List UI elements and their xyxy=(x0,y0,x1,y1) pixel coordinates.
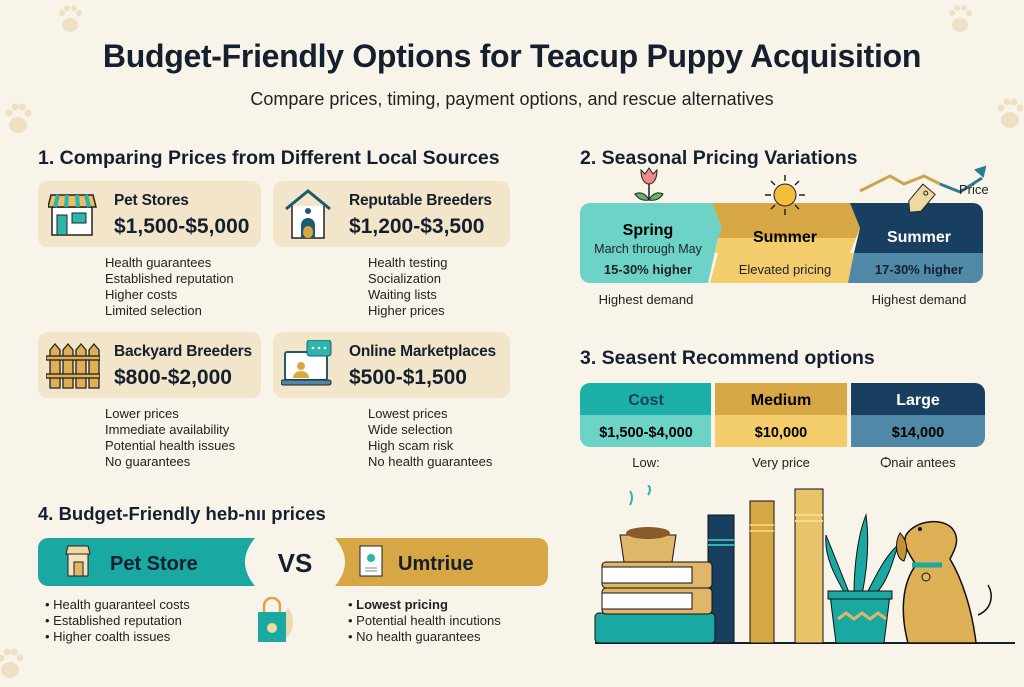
icon: small store xyxy=(66,546,90,576)
list: reputable breeders: Waiting lists xyxy=(368,287,437,302)
list: pet stores: Limited selection xyxy=(105,303,202,318)
title: Budget-Friendly Options for Teacup Puppy Acquisition xyxy=(103,38,921,74)
list: backyard breeders xyxy=(105,406,235,469)
heading: section 3: 3. Seasent Recommend options xyxy=(580,347,875,369)
card: backyard breeders: $800-$2,000 xyxy=(114,366,232,389)
list: pet stores xyxy=(105,255,234,318)
list: pet stores: Established reputation xyxy=(105,271,234,286)
list: online marketplaces xyxy=(368,406,492,469)
list: backyard breeders: Potential health issues xyxy=(105,438,235,453)
table: options: Ѻnair antees xyxy=(880,455,956,470)
table: options: Very price xyxy=(752,455,810,470)
table: options: $14,000 xyxy=(892,425,944,441)
chart: seasonal arrow band xyxy=(580,166,989,307)
list: other bullets: • Potential health incutions xyxy=(348,613,501,628)
panel: section 3 recommend options xyxy=(580,347,985,470)
subtitle: Compare prices, timing, payment options, and rescue alternatives xyxy=(250,89,774,109)
list: reputable breeders: Health testing xyxy=(368,255,448,270)
list: backyard breeders: No guarantees xyxy=(105,454,190,469)
list: pet store bullets xyxy=(45,597,190,644)
list: reputable breeders: Socialization xyxy=(368,271,441,286)
icon: storefront xyxy=(48,194,97,236)
list: pet store bullets: • Health guaranteel costs xyxy=(45,597,190,612)
card: online marketplaces: Online Marketplaces xyxy=(349,343,496,360)
card: pet stores: Pet Stores xyxy=(114,192,189,209)
card: reputable breeders: Reputable Breeders xyxy=(349,192,492,209)
card: reputable breeders: $1,200-$3,500 xyxy=(349,215,484,238)
list: pet stores: Higher costs xyxy=(105,287,177,302)
table: options: $10,000 xyxy=(755,425,807,441)
table: options: Cost xyxy=(628,392,664,409)
banner: pet store vs: Pet Store xyxy=(110,553,198,575)
table: options: Low: xyxy=(632,455,660,470)
card: reputable breeders xyxy=(273,181,510,247)
list: other bullets: • Lowest pricing xyxy=(348,597,448,612)
card: online marketplaces xyxy=(273,332,510,398)
chart: seasonal arrow band: 15-30% higher xyxy=(604,262,692,277)
card: backyard breeders: Backyard Breeders xyxy=(114,343,252,360)
list: reputable breeders xyxy=(368,255,448,318)
heading: section 1: 1. Comparing Prices from Different Local Sources xyxy=(38,147,500,169)
icon: document paw xyxy=(360,546,382,576)
panel: section 1 local sources xyxy=(38,147,510,469)
chart: seasonal arrow band: Spring xyxy=(623,222,673,239)
chart: seasonal arrow band: Price xyxy=(959,182,989,197)
chart: seasonal arrow band: Highest demand xyxy=(599,292,693,307)
banner: pet store vs xyxy=(38,538,548,642)
list: pet store bullets: • Established reputation xyxy=(45,613,182,628)
illustration: books, plant and dog xyxy=(594,485,1015,644)
chart: seasonal arrow band: Highest demand xyxy=(872,292,966,307)
table: options xyxy=(580,383,985,470)
icon: shopping bag xyxy=(258,598,293,642)
list: online marketplaces: High scam risk xyxy=(368,438,453,453)
chart: seasonal arrow band: 17-30% higher xyxy=(875,262,963,277)
heading: section 4: 4. Budget-Friendly heb-nıı prices xyxy=(38,503,326,524)
table: options: Large xyxy=(896,392,940,409)
icon: sun xyxy=(765,175,805,215)
list: other bullets: • No health guarantees xyxy=(348,629,480,644)
list: other bullets xyxy=(348,597,501,644)
icon: fence xyxy=(46,343,100,389)
list: online marketplaces: No health guarantees xyxy=(368,454,492,469)
list: backyard breeders: Lower prices xyxy=(105,406,179,421)
panel: section 4 comparison xyxy=(38,503,548,644)
chart: seasonal arrow band: Summer xyxy=(887,229,951,246)
card: pet stores xyxy=(38,181,261,247)
list: reputable breeders: Higher prices xyxy=(368,303,445,318)
panel: section 2 seasonal pricing xyxy=(580,147,989,307)
list: online marketplaces: Wide selection xyxy=(368,422,453,437)
chart: seasonal arrow band: Elevated pricing xyxy=(739,262,831,277)
card: backyard breeders xyxy=(38,332,261,398)
icon: house with dog xyxy=(285,189,331,239)
table: options: $1,500-$4,000 xyxy=(599,425,693,441)
banner: pet store vs: VS xyxy=(278,548,312,578)
card: pet stores: $1,500-$5,000 xyxy=(114,215,249,238)
chart: seasonal arrow band: Summer xyxy=(753,229,817,246)
icon: laptop chat xyxy=(281,340,332,386)
heading: section 2: 2. Seasonal Pricing Variations xyxy=(580,147,857,169)
card: online marketplaces: $500-$1,500 xyxy=(349,366,467,389)
icon: price trend arrow xyxy=(860,176,940,191)
table: options: Medium xyxy=(751,392,811,409)
list: backyard breeders: Immediate availability xyxy=(105,422,229,437)
chart: seasonal arrow band: March through May xyxy=(594,242,703,256)
list: pet stores: Health guarantees xyxy=(105,255,211,270)
list: online marketplaces: Lowest prices xyxy=(368,406,447,421)
icon: tulip xyxy=(635,168,663,200)
list: pet store bullets: • Higher coalth issues xyxy=(45,629,170,644)
banner: pet store vs: Umtriue xyxy=(398,553,474,575)
